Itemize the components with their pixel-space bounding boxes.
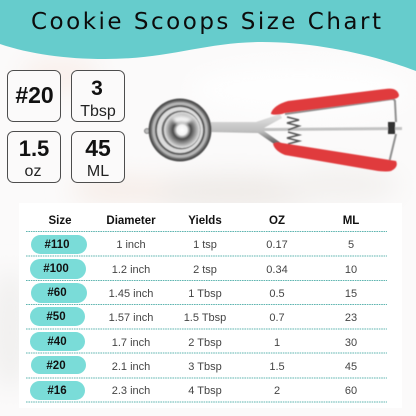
diameter column: 1.45 inch (109, 288, 153, 300)
size labels: #16 (47, 385, 67, 397)
icon: cookie scoop (144, 89, 402, 172)
diameter column: 1.2 inch (112, 264, 150, 276)
diameter column: 1.57 inch (109, 312, 153, 324)
info box: ounces: oz (25, 163, 41, 180)
ounces column: 1 (274, 337, 280, 349)
diameter column: 1.7 inch (112, 337, 150, 349)
table header: Size (48, 215, 72, 227)
info box: ounces: 1.5 (19, 136, 49, 161)
spring (287, 117, 299, 144)
ounces column: 2 (274, 385, 280, 397)
diameter column (109, 239, 153, 397)
size labels: #110 (45, 239, 69, 251)
yields column: 1 Tbsp (188, 288, 222, 300)
yields column: 1.5 Tbsp (184, 312, 226, 324)
diameter column: 2.1 inch (112, 361, 150, 373)
yields column: 4 Tbsp (188, 385, 222, 397)
info box: ounces (8, 132, 60, 182)
size labels (43, 239, 69, 397)
yields column: 1 tsp (193, 239, 217, 251)
info box: tablespoons: Tbsp (80, 103, 116, 120)
table header: ML (343, 215, 359, 227)
millilitres column: 45 (345, 361, 357, 373)
scoop pivot (144, 128, 150, 134)
size labels: #20 (46, 360, 66, 372)
ounces column: 1.5 (269, 361, 285, 373)
inner lip (157, 107, 203, 153)
bowl surface (164, 112, 200, 148)
info box: tablespoons (72, 70, 124, 122)
info box: millilitres: ML (87, 163, 109, 180)
title: Cookie Scoops Size Chart (31, 9, 381, 35)
millilitres column (345, 239, 357, 397)
size labels: #60 (47, 287, 67, 299)
millilitres column: 15 (345, 288, 357, 300)
millilitres column: 30 (345, 337, 357, 349)
rim groove (155, 105, 205, 155)
millilitres column: 23 (345, 312, 357, 324)
upper red grip (271, 89, 399, 115)
outer bowl rim (148, 98, 212, 162)
table header: OZ (269, 215, 285, 227)
table header (48, 215, 359, 227)
size pills (30, 235, 87, 400)
millilitres column: 10 (345, 264, 357, 276)
table header: Yields (188, 215, 222, 227)
info box: millilitres: 45 (85, 135, 111, 161)
info box: size (8, 70, 60, 122)
info box: size: #20 (15, 82, 54, 108)
dashed row lines (26, 232, 387, 402)
ounces column: 0.7 (269, 312, 285, 324)
ounces column: 0.5 (269, 288, 285, 300)
millilitres column: 60 (345, 385, 357, 397)
ounces column: 0.34 (266, 264, 288, 276)
diameter column: 1 inch (116, 239, 146, 251)
info box: tablespoons: 3 (91, 77, 103, 100)
handle clip (388, 122, 395, 134)
yields column: 3 Tbsp (188, 361, 222, 373)
ounces column: 0.17 (266, 239, 288, 251)
scoop rod (208, 114, 402, 146)
header wave (0, 0, 416, 71)
table header: Diameter (106, 215, 156, 227)
table panel (19, 203, 402, 408)
diameter column: 2.3 inch (112, 385, 150, 397)
inner lip shadow (162, 110, 200, 150)
size labels: #100 (43, 263, 69, 275)
lower red grip (273, 142, 397, 172)
size labels: #40 (47, 336, 67, 348)
yields column: 2 Tbsp (188, 337, 222, 349)
info box: millilitres (72, 132, 124, 182)
yields column (184, 239, 226, 397)
millilitres column: 5 (348, 239, 354, 251)
bowl top highlight (172, 115, 193, 124)
scoop frame (285, 99, 396, 163)
yields column: 2 tsp (193, 264, 217, 276)
rim highlight (152, 102, 208, 158)
size labels: #50 (46, 311, 66, 323)
ounces column (266, 239, 288, 397)
